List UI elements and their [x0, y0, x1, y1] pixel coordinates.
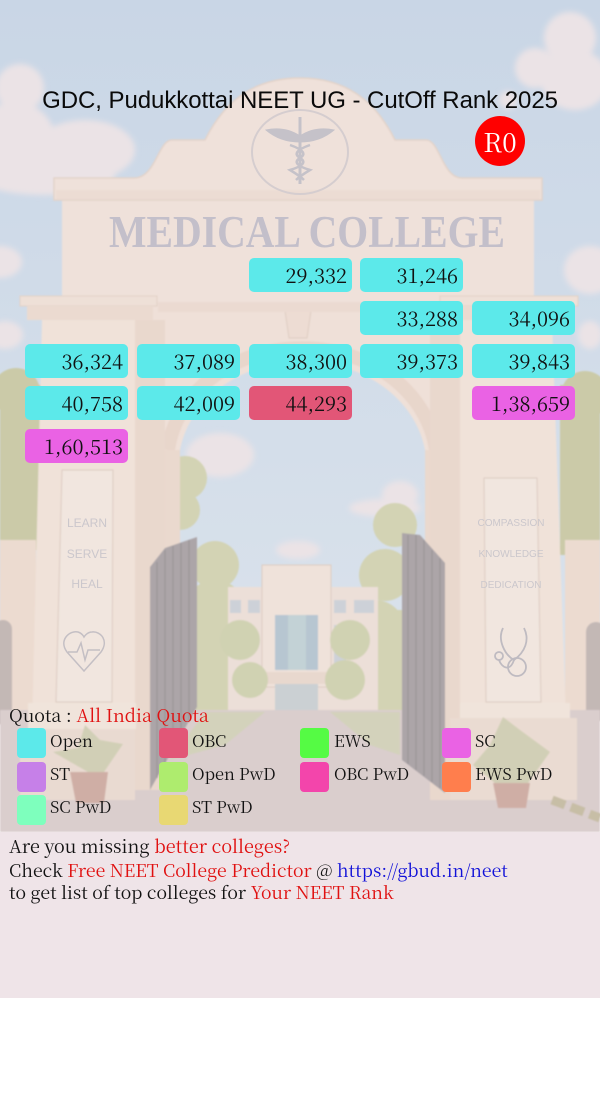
emblem: caduceus medallion [252, 110, 348, 194]
rank cell OBC: 44,293 [285, 388, 347, 417]
label: ST: ST [50, 761, 70, 785]
swatch: ST PwD [159, 795, 188, 825]
rank cell: 34,096 [508, 303, 570, 332]
gate arch [20, 78, 578, 570]
rank cell [472, 301, 575, 335]
rank cell: 39,843 [508, 346, 570, 375]
round badge R0: R0 [483, 121, 517, 160]
right pillar words: COMPASSION [477, 518, 545, 529]
icon: stethoscope [495, 628, 527, 676]
label: SC PwD: SC PwD [50, 794, 111, 818]
gates [150, 537, 197, 790]
side trees [0, 368, 600, 800]
clouds [0, 12, 600, 559]
promo heading: Are you missing better colleges? [9, 833, 290, 859]
rank cell: 31,246 [396, 260, 458, 289]
rank cell OBC [249, 386, 352, 420]
sign: medical college: MEDICAL COLLEGE [109, 206, 505, 257]
swatch: SC PwD [17, 795, 46, 825]
left pillar words [67, 516, 107, 591]
rank cell SC: 1,60,513 [44, 431, 123, 460]
swatch: ST [17, 762, 46, 792]
rank cell SC [25, 429, 128, 463]
distant building [228, 565, 378, 714]
promo line: predictor link: Check Free NEET College Predictor @ https://gbud.in/neet [9, 858, 508, 883]
left pillar words: LEARN [67, 516, 107, 530]
swatch: Open PwD [159, 762, 188, 792]
quota label: Quota : All India Quota [9, 702, 209, 728]
promo line: rank: to get list of top colleges for Your NEET Rank [9, 880, 394, 905]
title: GDC, Pudukkottai NEET UG - CutOff Rank 2025 [42, 87, 558, 114]
rank cell [137, 386, 240, 420]
icon: heart with pulse [64, 632, 104, 671]
trees inside arch [160, 456, 417, 715]
label: EWS PwD: EWS PwD [475, 761, 552, 785]
swatch: EWS PwD [442, 762, 471, 792]
legend [17, 728, 552, 825]
label: Open PwD: Open PwD [192, 761, 276, 785]
label: EWS: EWS [334, 728, 371, 752]
right pillar [430, 320, 577, 800]
label: OBC: OBC [192, 728, 226, 752]
curb [552, 800, 600, 818]
rank cell: 37,089 [173, 346, 235, 375]
potted plants [53, 717, 550, 808]
rank cell: 39,373 [396, 346, 458, 375]
right pillar words: KNOWLEDGE [478, 549, 544, 560]
rank cell [137, 344, 240, 378]
label: OBC PwD: OBC PwD [334, 761, 409, 785]
swatch: EWS [300, 728, 329, 758]
label: Open: Open [50, 728, 93, 752]
background illustration: medical college gate [0, 0, 600, 832]
road [0, 710, 600, 832]
rank cells [25, 258, 575, 463]
left pillar words: SERVE [67, 547, 107, 561]
rank cell: 29,332 [285, 260, 347, 289]
rank cell [25, 386, 128, 420]
left pillar [20, 320, 165, 800]
rank cell: 33,288 [396, 303, 458, 332]
foreground trees [220, 620, 370, 700]
rank cell: 42,009 [173, 388, 235, 417]
round badge R0 [475, 116, 525, 166]
label: SC: SC [475, 728, 496, 752]
swatch: Open [17, 728, 46, 758]
swatch: SC [442, 728, 471, 758]
side walls [0, 540, 600, 745]
rank cell SC [472, 386, 575, 420]
rank cell: 40,758 [61, 388, 123, 417]
rank cell [360, 344, 463, 378]
rank cell [249, 258, 352, 292]
right pillar words [477, 518, 545, 591]
rank cell [360, 258, 463, 292]
rank cell: 36,324 [61, 346, 123, 375]
left pillar words: HEAL [71, 577, 103, 591]
panel: predictor promo [0, 832, 600, 998]
rank cell SC: 1,38,659 [491, 388, 570, 417]
rank cell: 38,300 [285, 346, 347, 375]
swatch: OBC [159, 728, 188, 758]
rank cell [25, 344, 128, 378]
swatch: OBC PwD [300, 762, 329, 792]
rank cell [249, 344, 352, 378]
label: ST PwD: ST PwD [192, 794, 253, 818]
right pillar words: DEDICATION [481, 580, 541, 591]
rank cell [472, 344, 575, 378]
rank cell [360, 301, 463, 335]
